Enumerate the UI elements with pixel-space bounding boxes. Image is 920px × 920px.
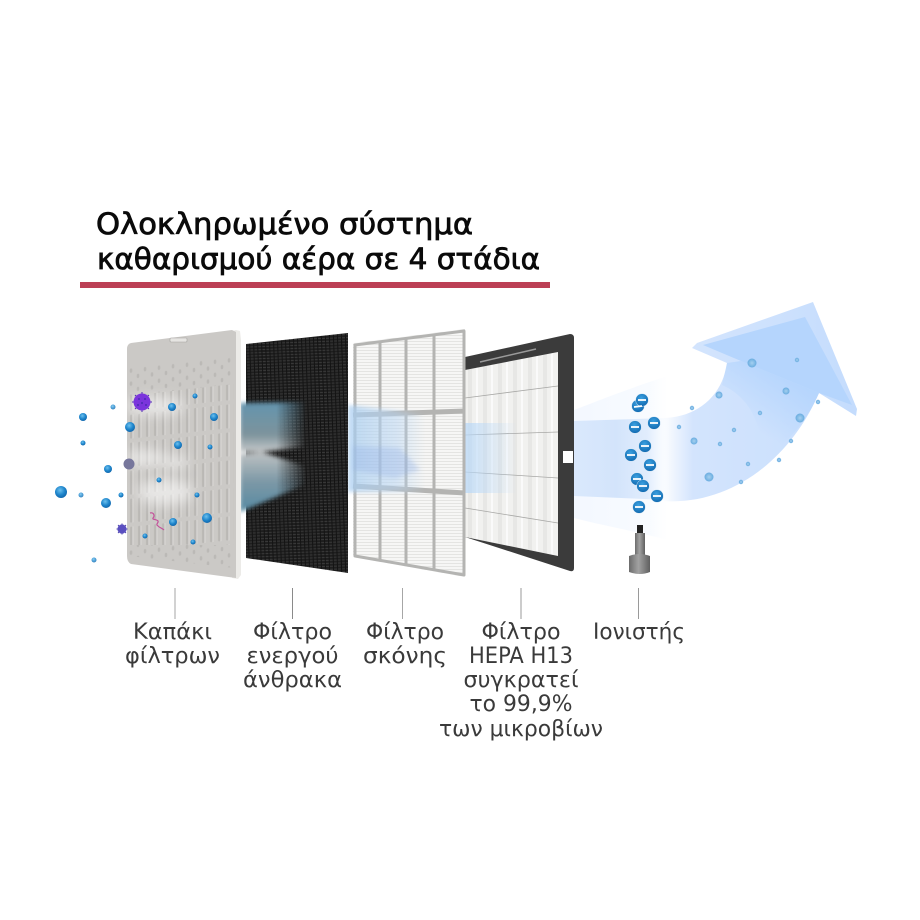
- carbon filter airflow: [240, 402, 312, 512]
- clean air particles: [677, 358, 820, 484]
- panel: activated carbon filter: [240, 333, 348, 573]
- label: filter cover: Καπάκι: [133, 620, 212, 645]
- label: HEPA filter: HEPA H13: [469, 644, 573, 669]
- label: dust filter: Φίλτρο: [366, 620, 444, 645]
- HEPA airflow: [465, 423, 517, 493]
- cover clip: [170, 338, 187, 342]
- label: ionizer: Ιονιστής: [593, 620, 685, 645]
- panel: filter cover: [125, 330, 241, 579]
- HEPA grid threads: [465, 386, 558, 523]
- title: [96, 207, 540, 276]
- ionised airflow band: [574, 376, 668, 540]
- label: activated carbon filter: άνθρακα: [243, 668, 342, 693]
- label: HEPA filter: Φίλτρο: [482, 620, 560, 645]
- large airflow arrow: [662, 302, 857, 501]
- label: HEPA filter: συγκρατεί: [464, 668, 579, 693]
- icon: ionizer: [629, 525, 650, 574]
- panel: dust filter: [348, 329, 465, 577]
- icon: grey dust particle: [124, 458, 134, 470]
- blue air particles: [55, 394, 218, 562]
- label: HEPA filter: το 99,9%: [470, 692, 572, 717]
- HEPA tab: [563, 451, 573, 463]
- label: HEPA filter: [439, 588, 603, 742]
- icon: small violet virus: [116, 524, 128, 534]
- label: ionizer: [593, 588, 685, 645]
- label: HEPA filter: των μικροβίων: [439, 717, 603, 742]
- label: activated carbon filter: ενεργού: [246, 644, 338, 669]
- title: Ολοκληρωμένο σύστημα: [96, 207, 473, 241]
- trapped dust smoke: [125, 397, 193, 505]
- panel: HEPA H13 filter: [465, 334, 574, 571]
- label: activated carbon filter: Φίλτρο: [253, 620, 332, 645]
- HEPA frame label: [480, 349, 536, 362]
- dust filter airflow: [348, 405, 425, 492]
- label: activated carbon filter: [243, 588, 342, 693]
- title underline: [80, 282, 550, 288]
- label: dust filter: [363, 588, 447, 669]
- label: filter cover: φίλτρων: [125, 644, 220, 669]
- negative ions: [625, 394, 663, 513]
- icon: purple virus: [132, 392, 152, 412]
- title: καθαρισμού αέρα σε 4 στάδια: [97, 242, 540, 276]
- icon: pink bacteria: [150, 513, 164, 530]
- label: dust filter: σκόνης: [363, 644, 447, 669]
- label: filter cover: [125, 588, 220, 669]
- dust filter frame: [353, 331, 465, 575]
